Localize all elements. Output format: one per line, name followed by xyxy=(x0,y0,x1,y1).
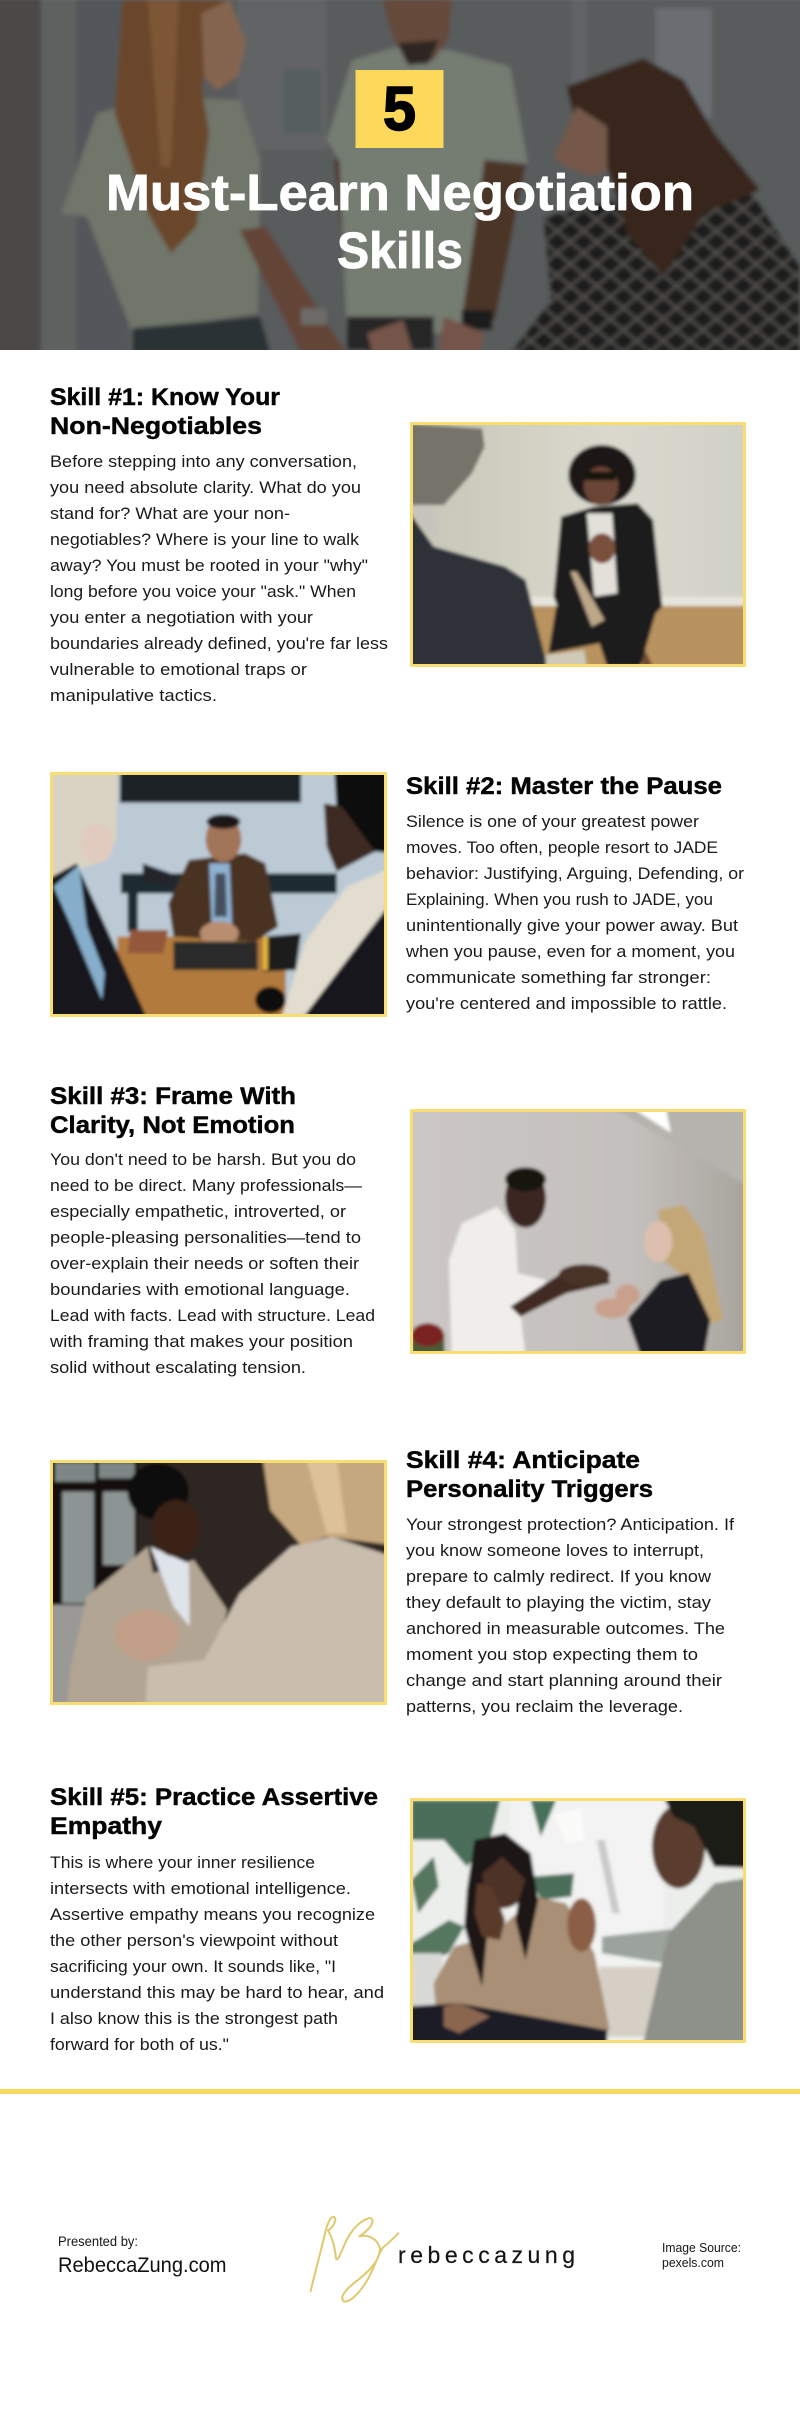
body text: skill 3: boundaries with emotional language. xyxy=(50,1280,350,1299)
photo: man and woman gesturing in discussion xyxy=(403,1105,755,1355)
badge: number 5 xyxy=(356,70,444,148)
photo: woman in black blazer speaking xyxy=(403,420,755,670)
body text: skill 2: Silence is one of your greatest power xyxy=(406,812,699,831)
heading: skill 4: Personality Triggers xyxy=(406,1476,653,1503)
body text: skill 1: manipulative tactics. xyxy=(50,686,217,705)
body text: skill 1: negotiables? Where is your line to walk xyxy=(50,530,360,549)
body text: skill 2: unintentionally give your power away. But xyxy=(406,916,738,935)
body text: skill 2: you're centered and impossible to rattle. xyxy=(406,994,727,1013)
footer: presented by: Presented by: xyxy=(58,2233,138,2249)
footer: image source: pexels.com xyxy=(662,2255,724,2270)
panel: skill 2 text xyxy=(405,773,744,1013)
hero photo banner xyxy=(0,0,800,357)
logo: rebeccazung signature and wordmark xyxy=(311,2217,575,2301)
body text: skill 5: Assertive empathy means you recognize xyxy=(50,1905,375,1924)
body text: skill 4: moment you stop expecting them to xyxy=(406,1645,698,1664)
photo: woman comforting man with dreadlocks xyxy=(403,1795,755,2045)
body text: skill 5: This is where your inner resilience xyxy=(50,1853,315,1872)
body text: skill 3: solid without escalating tension. xyxy=(50,1358,306,1377)
body text: skill 1: Before stepping into any conversation, xyxy=(50,452,357,471)
body text: skill 3: You don't need to be harsh. But you do xyxy=(50,1150,356,1169)
body text: skill 4: anchored in measurable outcomes. The xyxy=(406,1619,725,1638)
body text: skill 5: the other person's viewpoint without xyxy=(50,1931,338,1950)
body text: skill 3: especially empathetic, introverted, or xyxy=(50,1202,346,1221)
body text: skill 5 xyxy=(50,1853,384,2054)
body text: skill 1: away? You must be rooted in your "why" xyxy=(50,556,368,575)
icon: rz signature xyxy=(311,2217,398,2301)
body text: skill 4: change and start planning around their xyxy=(406,1671,722,1690)
body text: skill 4: Your strongest protection? Anticipation. If xyxy=(406,1515,734,1534)
badge: number 5: 5 xyxy=(383,75,416,144)
body text: skill 1: you enter a negotiation with your xyxy=(50,608,313,627)
body text: skill 1 xyxy=(50,452,388,705)
heading: skill 3: Clarity, Not Emotion xyxy=(50,1112,295,1139)
heading: skill 4 xyxy=(406,1447,653,1503)
footer: image source: Image Source: xyxy=(662,2240,741,2255)
body text: skill 2: moves. Too often, people resort to JADE xyxy=(406,838,718,857)
body text: skill 1: stand for? What are your non- xyxy=(50,504,290,523)
body text: skill 3: with framing that makes your position xyxy=(49,1332,353,1351)
body text: skill 5: understand this may be hard to hear, and xyxy=(50,1983,384,2002)
body text: skill 2: Explaining. When you rush to JADE, you xyxy=(406,890,713,909)
heading: skill 4: Skill #4: Anticipate xyxy=(406,1447,640,1474)
body text: skill 1: long before you voice your "ask." When xyxy=(50,582,356,601)
body text: skill 3: need to be direct. Many professionals— xyxy=(50,1176,362,1195)
photo: two women in beige coats talking outdoors xyxy=(46,1458,393,1707)
body text: skill 3: over-explain their needs or soften their xyxy=(50,1254,359,1273)
panel: skill 5 text xyxy=(50,1784,384,2054)
title: Skills xyxy=(337,222,463,279)
heading: skill 1 xyxy=(50,384,280,440)
body text: skill 5: forward for both of us." xyxy=(50,2035,229,2054)
body text: skill 4: prepare to calmly redirect. If you know xyxy=(406,1567,712,1586)
body text: skill 4: you know someone loves to interrupt, xyxy=(406,1541,704,1560)
title: Must-Learn Negotiation xyxy=(106,164,694,221)
body text: skill 4: patterns, you reclaim the leverage. xyxy=(406,1697,683,1716)
body text: skill 4 xyxy=(406,1515,734,1716)
footer: presented by: RebeccaZung.com xyxy=(58,2254,226,2277)
footer: presented by xyxy=(58,2233,226,2277)
body text: skill 1: boundaries already defined, you're far less xyxy=(50,634,388,653)
heading: skill 3 xyxy=(50,1083,296,1139)
heading: skill 1: Skill #1: Know Your xyxy=(50,384,280,411)
body text: skill 2: communicate something far stronger: xyxy=(406,968,711,987)
panel: skill 3 text xyxy=(49,1083,375,1377)
wordmark: rebeccazung xyxy=(398,2242,575,2268)
body text: skill 2: behavior: Justifying, Arguing, Defending, or xyxy=(406,864,744,883)
footer: image source xyxy=(662,2240,741,2270)
heading: skill 5 xyxy=(50,1784,378,1840)
title xyxy=(106,164,694,279)
heading: skill 5: Skill #5: Practice Assertive xyxy=(50,1784,378,1811)
footer divider xyxy=(0,2089,800,2094)
body text: skill 4: they default to playing the victim, stay xyxy=(406,1593,712,1612)
body text: skill 3 xyxy=(49,1150,375,1377)
panel: skill 1 text xyxy=(50,384,388,705)
body text: skill 3: Lead with facts. Lead with structure. Lead xyxy=(50,1306,375,1325)
body text: skill 1: you need absolute clarity. What do you xyxy=(50,478,361,497)
heading: skill 2: Skill #2: Master the Pause xyxy=(406,773,722,800)
heading: skill 5: Empathy xyxy=(50,1813,162,1840)
body text: skill 1: vulnerable to emotional traps or xyxy=(50,660,307,679)
body text: skill 2: when you pause, even for a moment, you xyxy=(405,942,735,961)
body text: skill 3: people-pleasing personalities—tend to xyxy=(50,1228,361,1247)
heading: skill 1: Non-Negotiables xyxy=(50,413,262,440)
body text: skill 2 xyxy=(405,812,744,1013)
body text: skill 5: intersects with emotional intelligence. xyxy=(50,1879,351,1898)
body text: skill 5: I also know this is the strongest path xyxy=(50,2009,338,2028)
body text: skill 5: sacrificing your own. It sounds like, "I xyxy=(50,1957,336,1976)
photo: man at desk facing two colleagues xyxy=(46,770,393,1020)
heading: skill 3: Skill #3: Frame With xyxy=(50,1083,296,1110)
panel: skill 4 text xyxy=(406,1447,734,1716)
